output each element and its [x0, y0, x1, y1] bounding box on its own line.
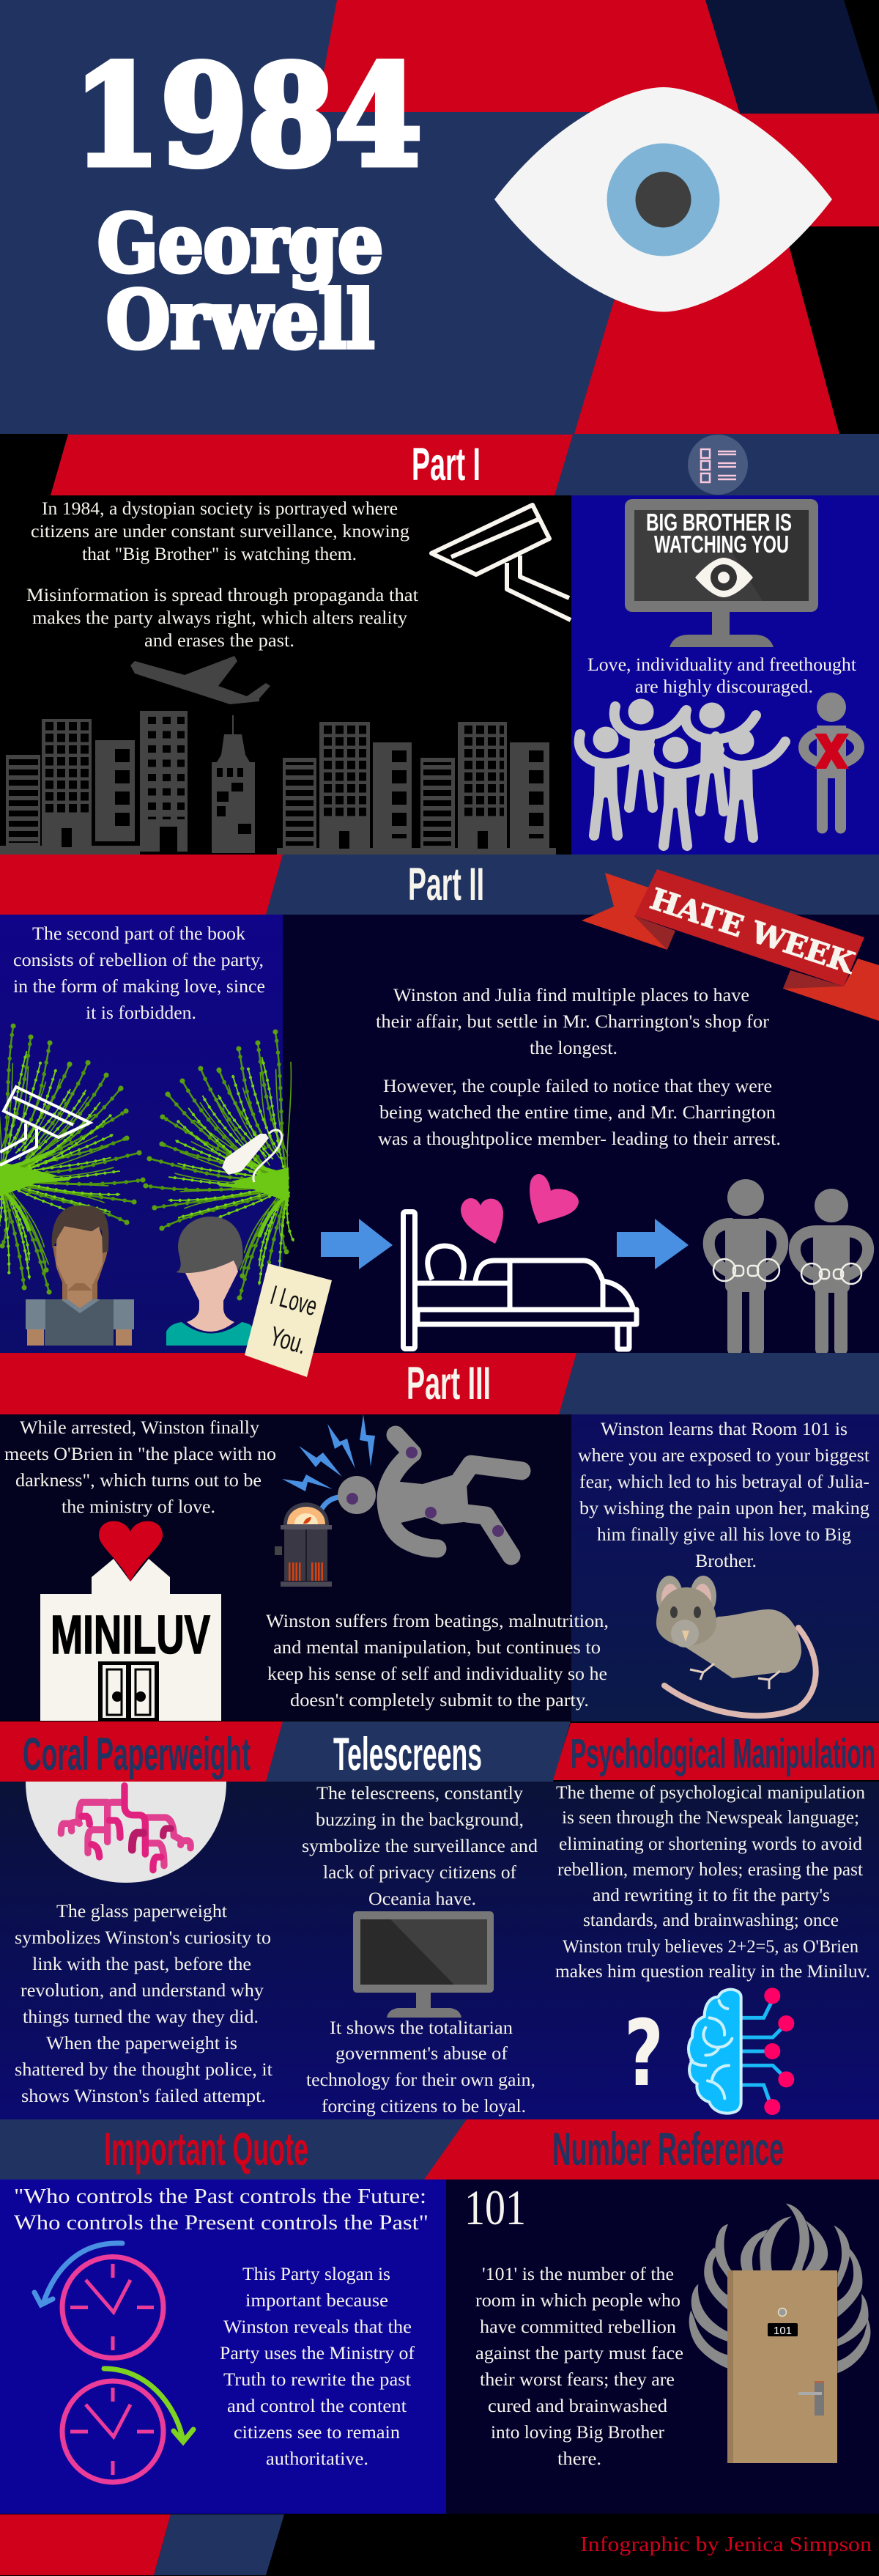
text: discouraged: are highly discouraged. — [635, 677, 813, 697]
arrow: to bed — [321, 1219, 393, 1269]
heading: Part I: Part I — [412, 439, 481, 490]
text: slogan explanation: important because — [245, 2291, 388, 2311]
text: quote — [14, 2185, 429, 2234]
text: surveillance description: makes the party always right, which alters reality — [32, 608, 408, 628]
panel: Part III left — [0, 1414, 571, 1721]
panel: Part I left — [0, 495, 571, 855]
text: discouraged — [587, 655, 856, 697]
text: Winston suffers — [266, 1612, 609, 1710]
text: psychological manipulation: eliminating or shortening words to avoid — [559, 1834, 862, 1854]
text: telescreens intro: lack of privacy citizens of — [323, 1863, 517, 1883]
text: quote: "Who controls the Past controls the Future: — [14, 2185, 426, 2208]
panel: Part II left — [0, 915, 283, 1353]
icon: telescreen big brother — [625, 499, 818, 647]
illustration: tentacles — [689, 2204, 870, 2373]
text: telescreens intro — [302, 1784, 538, 1909]
illustration: right tree — [146, 1032, 301, 1298]
heading: big brother slogan: BIG BROTHER IS — [646, 509, 792, 536]
text: surveillance description: In 1984, a dystopian society is portrayed where — [42, 499, 398, 519]
text: surveillance description: and erases the past. — [144, 631, 294, 651]
text: telescreens intro: symbolize the surveillance and — [302, 1837, 538, 1856]
text: rebellion — [13, 924, 265, 1023]
text: telescreens conclusion: It shows the totalitarian — [330, 2018, 513, 2038]
panel: Part I header band — [0, 434, 879, 495]
text: Miniluv arrest — [4, 1418, 276, 1517]
illustration: arrested couple — [709, 1179, 868, 1349]
subtitle: author — [97, 198, 383, 366]
text: rebellion: in the form of making love, since — [13, 977, 265, 997]
text: slogan explanation — [220, 2265, 415, 2469]
icon: small security camera — [0, 1087, 90, 1165]
heading: Part II: Part II — [408, 859, 484, 910]
credit: Infographic by Jenica Simpson — [580, 2533, 872, 2556]
text: Room 101: Brother. — [695, 1551, 757, 1571]
panel: important quote — [0, 2180, 446, 2514]
icon: small eye — [695, 558, 753, 597]
title: 1984 — [73, 35, 422, 197]
text: psychological manipulation — [555, 1783, 870, 1982]
icon: question mark: ? — [624, 2001, 664, 2107]
heading: Important Quote: Important Quote — [104, 2124, 308, 2175]
heading: Part III: Part III — [407, 1358, 491, 1409]
text: paperweight: things turned the way they did. — [23, 2007, 259, 2027]
text: telescreens conclusion — [306, 2018, 535, 2116]
text: paperweight: When the paperweight is — [46, 2034, 237, 2053]
icon: checklist — [688, 435, 748, 495]
text: discouraged: Love, individuality and freethought — [587, 655, 856, 675]
note: I Love You — [245, 1263, 332, 1377]
text: telescreens intro: The telescreens, constantly — [316, 1784, 524, 1804]
text: Room 101 explanation: their worst fears; they are — [480, 2370, 675, 2390]
text: slogan explanation: and control the content — [227, 2396, 407, 2416]
icon: coral paperweight — [26, 1782, 226, 1883]
text: Charrington shop: their affair, but settle in Mr. Charrington's shop for — [376, 1012, 770, 1032]
panel: Part III right — [571, 1414, 879, 1721]
text: Charrington shop: was a thoughtpolice member- leading to their arrest. — [378, 1129, 781, 1149]
text: quote: Who controls the Present controls the Past" — [14, 2211, 429, 2234]
text: rebellion: The second part of the book — [32, 924, 246, 944]
text: Charrington shop: the longest. — [530, 1038, 617, 1058]
illustration: Julia — [166, 1217, 253, 1346]
label: door number: 101 — [774, 2325, 792, 2337]
heading: Coral Paperweight: Coral Paperweight — [23, 1729, 251, 1780]
icon: Room 101 door — [727, 2270, 837, 2463]
illustration: crowd — [579, 699, 785, 851]
icon: digital brain — [689, 1988, 794, 2115]
text: slogan explanation: Winston reveals that the — [223, 2317, 412, 2337]
text: psychological manipulation: rebellion, memory holes; erasing the past — [557, 1860, 863, 1880]
heading: big brother slogan — [646, 509, 792, 558]
text: telescreens conclusion: government's abuse of — [335, 2044, 508, 2064]
text: Room 101 explanation: have committed rebellion — [480, 2317, 677, 2337]
text: paperweight: shows Winston's failed attempt. — [21, 2086, 266, 2106]
text: telescreens intro: Oceania have. — [368, 1889, 476, 1909]
text: psychological manipulation: makes him question reality in the Miniluv. — [555, 1962, 870, 1982]
text: psychological manipulation: and rewriting it to fit the party's — [593, 1886, 830, 1905]
text: Winston suffers: and mental manipulation, but continues to — [273, 1638, 601, 1658]
text: slogan explanation: authoritative. — [266, 2449, 368, 2469]
illustration: torture machine — [275, 1497, 338, 1587]
text: Charrington shop: Winston and Julia find multiple places to have — [393, 986, 749, 1005]
label: MINILUV: MINILUV — [51, 1604, 210, 1665]
icon: big eye — [494, 87, 832, 312]
text: telescreens conclusion: technology for their own gain, — [306, 2070, 535, 2090]
figure: Winston arrested — [709, 1179, 782, 1349]
text: Charrington shop: being watched the entire time, and Mr. Charrington — [379, 1103, 776, 1123]
text: Room 101: Winston learns that Room 101 is — [601, 1420, 848, 1439]
text: psychological manipulation: Winston truly believes 2+2=5, as O'Brien — [563, 1937, 858, 1957]
icon: lightning bolts — [282, 1414, 375, 1491]
text: psychological manipulation: The theme of psychological manipulation — [556, 1783, 865, 1803]
panel: header — [0, 0, 879, 434]
text: paperweight: link with the past, before the — [32, 1955, 251, 1974]
text: Winston suffers: keep his sense of self and individuality so he — [267, 1664, 607, 1684]
text: Room 101 explanation: into loving Big Brother — [491, 2423, 665, 2443]
text: Miniluv arrest: meets O'Brien in "the place with no — [4, 1444, 276, 1464]
illustration: left tree — [0, 1026, 143, 1292]
heading: Telescreens: Telescreens — [333, 1729, 482, 1780]
text: Room 101 explanation: '101' is the number of the — [482, 2265, 674, 2284]
text: Room 101 explanation: room in which people who — [475, 2291, 680, 2311]
icon: telescreen — [353, 1911, 494, 2018]
icon: clock rewinding — [34, 2243, 163, 2358]
icon: airplane — [130, 656, 270, 704]
text: Room 101: him finally give all his love to Big — [597, 1525, 851, 1545]
text: psychological manipulation: standards, and brainwashing; once — [583, 1911, 839, 1930]
text: telescreens intro: buzzing in the background, — [316, 1810, 524, 1830]
text: Room 101 explanation: there. — [557, 2449, 601, 2469]
text: Winston suffers: Winston suffers from beatings, malnutrition, — [266, 1612, 609, 1631]
note: I Love You: You. — [267, 1321, 310, 1359]
banner: Hate Week — [582, 869, 879, 1021]
text: paperweight: The glass paperweight — [56, 1902, 227, 1922]
text: paperweight: revolution, and understand why — [21, 1981, 264, 2001]
icon: hearts — [461, 1174, 579, 1244]
icon: doors — [98, 1661, 159, 1721]
heading: Hate Week: HATE WEEK — [646, 882, 859, 981]
icon: clock forward — [62, 2369, 193, 2482]
text: Room 101: fear, which led to his betrayal of Julia- — [579, 1472, 869, 1492]
illustration: beaten Winston — [338, 1435, 522, 1556]
text: surveillance description — [26, 499, 418, 651]
panel: bottom header band — [0, 2119, 879, 2180]
text: Miniluv arrest: darkness", which turns out to be — [15, 1471, 262, 1491]
icon: Ministry of Love building — [40, 1521, 221, 1721]
icon: microphone bug — [222, 1130, 282, 1182]
text: Room 101 explanation: against the party must face — [475, 2344, 683, 2363]
icon: heart — [99, 1521, 163, 1582]
illustration: city skyline — [0, 711, 556, 855]
text: Room 101 — [578, 1420, 870, 1571]
illustration: rat — [656, 1576, 816, 1716]
text: Miniluv arrest: the ministry of love. — [62, 1497, 215, 1517]
text: slogan explanation: This Party slogan is — [242, 2265, 390, 2284]
panel: themes header band — [0, 1721, 879, 1782]
text: slogan explanation: citizens see to remain — [234, 2423, 401, 2443]
text: surveillance description: Misinformation is spread through propaganda that — [26, 586, 418, 605]
text: paperweight — [15, 1902, 272, 2106]
panel: Part III header band — [0, 1353, 879, 1414]
panel: number reference — [446, 2180, 879, 2514]
text: slogan explanation: Party uses the Ministry of — [220, 2344, 415, 2363]
subtitle: author: George — [97, 198, 383, 290]
text: Miniluv arrest: While arrested, Winston finally — [20, 1418, 260, 1438]
text: Room 101: where you are exposed to your biggest — [578, 1446, 869, 1466]
illustration: Winston — [26, 1206, 134, 1346]
text: rebellion: it is forbidden. — [86, 1003, 196, 1023]
text: Charrington shop — [376, 986, 781, 1149]
text: paperweight: symbolizes Winston's curiosity to — [15, 1928, 271, 1948]
illustration: bed — [403, 1212, 637, 1349]
number: 101: 101 — [464, 2180, 526, 2235]
subtitle: author: Orwell — [106, 274, 374, 366]
panel: Part I right — [571, 495, 879, 855]
text: Winston suffers: doesn't completely submit to the party. — [290, 1691, 589, 1710]
text: surveillance description: citizens are under constant surveillance, knowing — [31, 522, 410, 542]
text: telescreens conclusion: forcing citizens to be loyal. — [322, 2097, 526, 2116]
text: surveillance description: that "Big Brother" is watching them. — [82, 545, 357, 564]
text: paperweight: shattered by the thought police, it — [15, 2060, 272, 2080]
text: Room 101 explanation: cured and brainwashed — [488, 2396, 668, 2416]
panel: Part II header band — [0, 855, 879, 915]
note: I Love You: I Love — [267, 1280, 321, 1321]
panel: Part II right — [283, 915, 879, 1353]
heading: big brother slogan: WATCHING YOU — [654, 531, 789, 558]
arrow: to arrest — [617, 1219, 689, 1269]
text: slogan explanation: Truth to rewrite the past — [223, 2370, 411, 2390]
text: Room 101 explanation — [475, 2265, 683, 2469]
text: Charrington shop: However, the couple failed to notice that they were — [383, 1077, 772, 1096]
text: Room 101: by wishing the pain upon her, making — [579, 1499, 870, 1518]
icon: coral — [61, 1786, 190, 1870]
panel: footer — [0, 2514, 879, 2576]
text: rebellion: consists of rebellion of the party, — [13, 951, 264, 970]
illustration: dissenter with red X — [804, 693, 859, 828]
icon: security camera — [431, 505, 571, 620]
figure: Julia arrested — [795, 1189, 868, 1349]
text: psychological manipulation: is seen through the Newspeak language; — [562, 1808, 859, 1828]
panel: themes section background — [0, 1782, 879, 2120]
